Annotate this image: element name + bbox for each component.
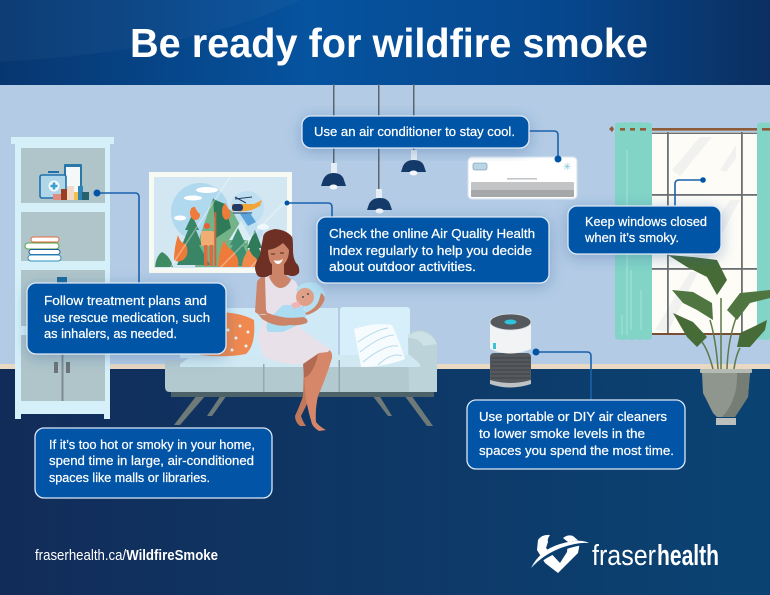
callout: air cleaners: to lower smoke levels in the (479, 427, 645, 441)
air conditioner (468, 157, 577, 199)
woman holding baby (255, 229, 332, 431)
window with curtains (609, 122, 770, 340)
air purifier (490, 314, 531, 388)
icon: first aid kit and medication (40, 164, 89, 200)
callout: air quality health index: Check the online Air Quality Health (329, 227, 535, 241)
neck and chest (269, 264, 291, 288)
callout: air cleaners: Use portable or DIY air cleaners (479, 410, 667, 424)
white striped pillow (354, 324, 405, 367)
icon: heart and swoosh (531, 535, 589, 573)
callout: air-conditioned spaces: If it’s too hot or smoky in your home, (49, 438, 255, 452)
sofa (165, 307, 437, 426)
callout: treatment plans: Follow treatment plans and (44, 294, 207, 308)
forearm (258, 313, 308, 326)
header banner (0, 0, 770, 85)
plant in pot (668, 255, 770, 425)
callout: treatment plans (27, 190, 226, 354)
wall picture: wildfire scene (149, 172, 292, 273)
wall (0, 84, 770, 365)
wordmark: fraser (592, 540, 656, 572)
icon: box on shelf (57, 277, 67, 285)
callout: keep windows closed (568, 177, 721, 254)
callout: air cleaners: spaces you spend the most time. (479, 444, 674, 458)
bookshelf (11, 137, 114, 419)
face (268, 243, 289, 268)
title: Be ready for wildfire smoke (130, 20, 648, 66)
air conditioner: ✳ (563, 162, 571, 173)
dress (257, 276, 330, 364)
ceiling lamps (321, 84, 426, 214)
callout: air-conditioned spaces: spaces like malls or libraries. (49, 471, 210, 485)
fraser health logo: health (657, 540, 719, 572)
callout: air quality health index: about outdoor activities. (329, 260, 476, 274)
website link: fraserhealth.ca/WildfireSmoke (35, 548, 218, 564)
floor (0, 364, 770, 595)
far leg (295, 365, 312, 426)
callout: air quality health index: Index regularly to help you decide (329, 244, 532, 258)
hair (255, 229, 299, 277)
callout: treatment plans: as inhalers, as needed. (44, 327, 177, 341)
baby in blanket (266, 282, 325, 332)
callout: air conditioner: Use an air conditioner to stay cool. (314, 125, 515, 139)
callout: keep windows closed: Keep windows closed (585, 215, 707, 229)
callout: air-conditioned spaces: spend time in large, air-conditioned (49, 454, 254, 468)
orange polka-dot pillow (200, 312, 254, 356)
callout: air conditioner (302, 116, 562, 162)
callout: air-conditioned spaces (35, 428, 272, 498)
callout: air quality health index (284, 200, 549, 283)
near leg (303, 349, 332, 431)
callout: treatment plans: use rescue medication, such (44, 311, 210, 325)
callout: keep windows closed: when it’s smoky. (584, 231, 679, 245)
fraser health logo (531, 535, 719, 573)
icon: stack of books (25, 237, 61, 261)
callout: air cleaners (467, 348, 685, 469)
upper arm (255, 277, 268, 314)
